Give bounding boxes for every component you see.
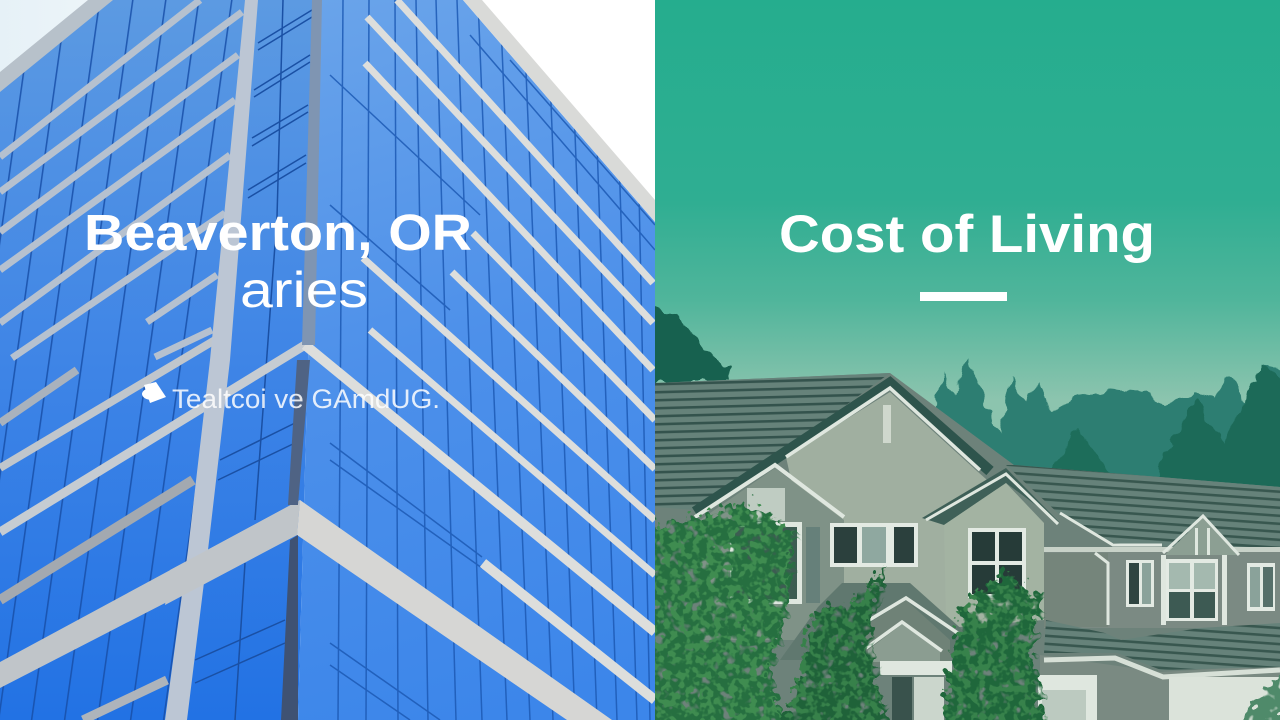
- thick lower band right: [297, 500, 612, 720]
- roof edges: [0, 0, 655, 222]
- window: wing: [968, 528, 1026, 598]
- porch gable: [866, 598, 962, 720]
- window: right row: [1126, 559, 1275, 621]
- house: wing roof: [922, 468, 1060, 525]
- left face floor bands: [0, 0, 305, 720]
- right face of the glass tower: [298, 0, 655, 720]
- dormer gable: [1161, 516, 1239, 625]
- caption text: Tealtcoi ve GAmdUG.: [172, 384, 440, 414]
- eave trim: [1060, 513, 1162, 545]
- house: main gable trim: [695, 383, 990, 512]
- house: main roof: [655, 373, 890, 510]
- house: main gable light trim: [786, 388, 980, 470]
- heading: Cost of Living: Cost of Living: [779, 205, 1155, 264]
- window: triple: [830, 523, 918, 567]
- house: right roof: [1006, 465, 1280, 548]
- garage doors: [1038, 675, 1280, 720]
- subheading fragment: aries: [240, 262, 368, 318]
- house: lower wall: [1040, 655, 1280, 720]
- house: lower roof right: [1044, 620, 1280, 670]
- house: left windows: [730, 488, 820, 604]
- right face mullions: [330, 0, 655, 720]
- vertical pillar: [165, 0, 258, 720]
- background forest: [650, 305, 1280, 520]
- panel: building photo: [0, 0, 655, 720]
- accent bar: [920, 292, 1007, 301]
- thick band over pillar: [165, 500, 300, 605]
- dark corner column: [302, 0, 322, 345]
- dark corner column base: [281, 535, 298, 720]
- left face of the glass tower: [0, 0, 318, 720]
- house: main wall: [786, 392, 1044, 640]
- house: wing trim: [926, 474, 1058, 524]
- panel: neighbourhood photo: [650, 0, 1280, 720]
- house: backing mass: [655, 373, 1280, 720]
- icon: small badge: [142, 382, 166, 403]
- thick lower band left: [0, 500, 300, 688]
- dark corner column lower: [288, 360, 310, 505]
- house: right wall: [1044, 547, 1280, 628]
- tree: far right sapling: [1240, 680, 1280, 720]
- mullions between pillar and corner: [195, 0, 312, 720]
- house: lower fascia: [1044, 658, 1280, 677]
- heading: Beaverton, OR: Beaverton, OR: [84, 204, 472, 261]
- house: gable vent: [883, 405, 891, 443]
- tree: centre: [782, 567, 890, 720]
- house: wing wall: [944, 483, 1044, 530]
- porch roof: [780, 583, 966, 660]
- house: left gable: [695, 465, 844, 640]
- right face floor bands: [305, 0, 655, 700]
- tree: left: [650, 503, 795, 720]
- house: downspout: [1095, 553, 1108, 625]
- tree: right: [942, 570, 1050, 720]
